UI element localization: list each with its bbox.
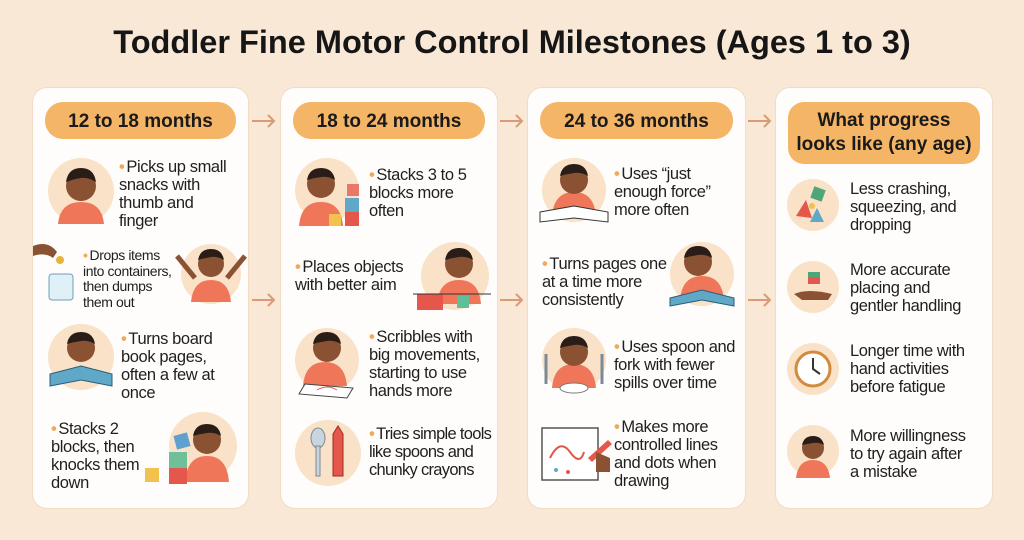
text: drops items: them out: [83, 294, 134, 310]
text: turns pages one at a time: •Turns pages one: [542, 255, 667, 273]
text: tries simple tools: like spoons and: [369, 443, 473, 461]
text: turns board book pages: book pages,: [121, 348, 207, 366]
text: uses spoon and fork: fork with fewer: [614, 356, 714, 374]
heading: 24 to 36 months: [540, 102, 733, 139]
text: picks up snacks: •Picks up small: [119, 158, 226, 176]
text: tries simple tools: chunky crayons: [369, 461, 474, 479]
text: stacks 3 to 5 blocks: •Stacks 3 to 5: [369, 166, 467, 184]
heading: what progress looks like: What progress: [817, 110, 951, 131]
text: uses spoon and fork: spills over time: [614, 374, 717, 392]
text: scribbles: big movements,: [369, 346, 480, 364]
text: picks up snacks: finger: [119, 212, 158, 230]
text: just enough force: [614, 165, 711, 219]
text: scribbles: [369, 328, 480, 400]
text: places objects: •Places objects: [295, 258, 403, 276]
icon: toddler cheering: [175, 244, 247, 304]
text: longer time: hand activities: [850, 360, 949, 378]
panel: 24 to 36 months: [528, 88, 745, 508]
text: places objects: with better aim: [295, 276, 396, 294]
heading: 12 to 18 months: 12 to 18 months: [68, 111, 213, 132]
text: less crashing: [850, 180, 956, 234]
panel: 12 to 18 months: [33, 88, 248, 508]
text: just enough force: enough force”: [614, 183, 711, 201]
text: longer time: [850, 342, 965, 396]
panel: 18 to 24 months: [281, 88, 497, 508]
text: scribbles: starting to use: [369, 364, 467, 382]
text: less crashing: Less crashing,: [850, 180, 951, 198]
text: turns pages one at a time: consistently: [542, 291, 623, 309]
text: more willingness: [850, 427, 966, 481]
icon: toddler stacking blocks: [295, 158, 359, 226]
icon: toddler trying again: [787, 425, 839, 478]
text: picks up snacks: thumb and: [119, 194, 193, 212]
text: more accurate placing: More accurate: [850, 261, 950, 279]
text: more accurate placing: placing and: [850, 279, 930, 297]
icon: toddler turning page: [670, 242, 734, 307]
text: stacks 2 blocks: •Stacks 2: [51, 420, 118, 438]
text: picks up snacks: [119, 158, 226, 230]
icon: toddler snack: [48, 158, 114, 224]
text: uses spoon and fork: •Uses spoon and: [614, 338, 735, 356]
text: drops items: into containers,: [83, 262, 172, 278]
icon: toddler with blocks: [145, 412, 237, 484]
title: Toddler Fine Motor Control Milestones (Ages 1 to 3): [113, 24, 911, 60]
text: less crashing: dropping: [850, 216, 911, 234]
icon: drawing paper: [541, 427, 612, 481]
text: more willingness: to try again after: [850, 445, 962, 463]
text: turns board book pages: often a few at: [121, 366, 214, 384]
text: controlled lines: drawing: [614, 472, 669, 490]
text: tries simple tools: [369, 425, 492, 479]
heading: 18 to 24 months: 18 to 24 months: [317, 111, 461, 132]
text: stacks 3 to 5 blocks: [369, 166, 467, 220]
text: picks up snacks: snacks with: [119, 176, 200, 194]
text: controlled lines: [614, 418, 718, 490]
text: controlled lines: and dots when: [614, 454, 716, 472]
text: stacks 2 blocks: blocks, then: [51, 438, 134, 456]
text: less crashing: squeezing, and: [850, 198, 956, 216]
text: drops items: then dumps: [83, 278, 152, 294]
heading: 12 to 18 months: [45, 102, 236, 139]
text: drops items: •Drops items: [83, 247, 160, 263]
icon: clock: [787, 343, 839, 395]
text: turns pages one at a time: [542, 255, 667, 309]
heading: what progress looks like: [788, 102, 980, 164]
text: tries simple tools: •Tries simple tools: [369, 425, 491, 443]
heading: 24 to 36 months: 24 to 36 months: [564, 111, 709, 132]
text: places objects: [295, 258, 403, 294]
text: stacks 2 blocks: knocks them: [51, 456, 139, 474]
text: turns pages one at a time: at a time more: [542, 273, 642, 291]
icon: toddler gentle with book: [540, 158, 608, 222]
icon: toddler scribbling: [295, 328, 359, 398]
text: stacks 2 blocks: [51, 420, 139, 492]
text: stacks 2 blocks: down: [51, 474, 89, 492]
text: just enough force: •Uses “just: [614, 165, 691, 183]
text: stacks 3 to 5 blocks: blocks more: [369, 184, 454, 202]
heading: what progress looks like: looks like (any age): [796, 134, 972, 155]
text: just enough force: more often: [614, 201, 689, 219]
text: more willingness: a mistake: [850, 463, 917, 481]
text: more accurate placing: gentler handling: [850, 297, 961, 315]
text: uses spoon and fork: [614, 338, 735, 392]
icon: hand with block: [787, 261, 839, 313]
panel: what progress looks like: [776, 88, 992, 508]
text: stacks 3 to 5 blocks: often: [369, 202, 404, 220]
text: turns board book pages: •Turns board: [121, 330, 212, 348]
icon: shapes: [787, 179, 839, 231]
text: turns board book pages: [121, 330, 215, 402]
heading: 18 to 24 months: [293, 102, 485, 139]
text: longer time: before fatigue: [850, 378, 945, 396]
icon: spoon and crayon: [295, 420, 361, 486]
text: controlled lines: controlled lines: [614, 436, 718, 454]
icon: toddler reading: [48, 324, 114, 390]
text: scribbles: hands more: [369, 382, 452, 400]
text: more willingness: More willingness: [850, 427, 966, 445]
text: longer time: Longer time with: [850, 342, 965, 360]
text: more accurate placing: [850, 261, 961, 315]
text: scribbles: •Scribbles with: [369, 328, 473, 346]
icon: toddler placing objects: [413, 242, 491, 310]
icon: hand and cup: [33, 244, 74, 300]
icon: toddler with spoon and fork: [542, 328, 606, 394]
text: controlled lines: •Makes more: [614, 418, 708, 436]
text: turns board book pages: once: [121, 384, 155, 402]
text: drops items: [83, 247, 172, 310]
